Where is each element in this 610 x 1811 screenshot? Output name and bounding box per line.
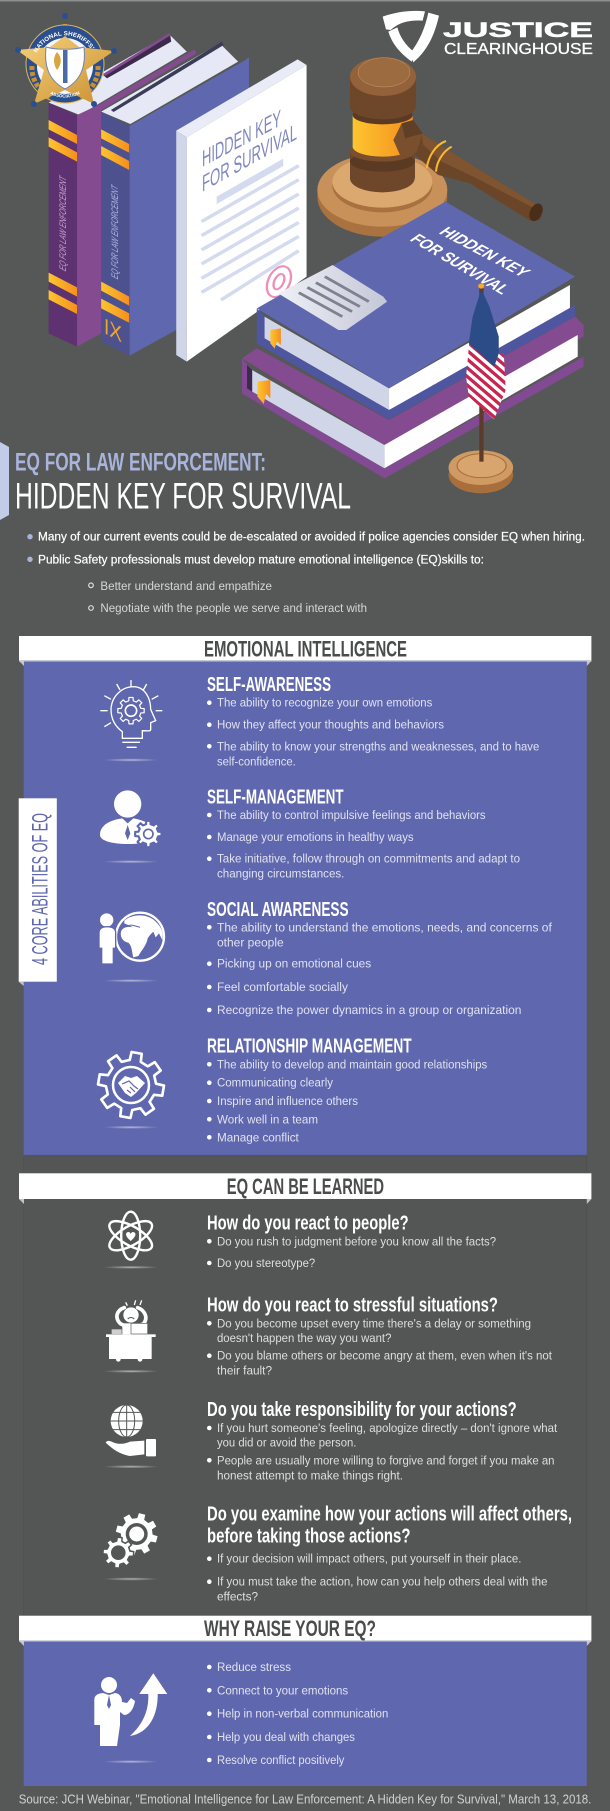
banner: why raise your EQ [19,1616,591,1646]
icon: stressed person at desk [103,1300,159,1373]
block: social awareness: SOCIAL AWARENESS [207,898,349,921]
banner: emotional intelligence [19,636,591,666]
block: self-awareness: SELF-AWARENESS [207,673,331,696]
document title: HIDDEN KEY [202,105,281,173]
banner: why raise your EQ: WHY RAISE YOUR EQ? [204,1616,376,1641]
banner: EQ can be learned: EQ CAN BE LEARNED [227,1174,384,1199]
block: social awareness: other people [217,935,284,949]
spine title: blue book: EQ FOR LAW ENFORCEMENT [111,183,121,281]
logo: National Sheriffs' Association: ASSOCIATION [50,91,80,98]
benefits list: Help in non-verbal communication [217,1707,388,1721]
block: relationship management: RELATIONSHIP MANAGEMENT [207,1034,412,1057]
block: relationship management: Inspire and influence others [217,1094,358,1108]
block: reacting to stress: How do you react to stressful situations? [207,1293,498,1316]
document title: FOR SURVIVAL [202,119,297,198]
block: taking responsibility: People are usually more willing to forgive and forget if you make an [217,1453,555,1467]
benefits list: Resolve conflict positively [217,1753,345,1767]
block: self-management: Manage your emotions in healthy ways [217,830,414,844]
intro bullet list: Better understand and empathize [100,579,272,593]
panel: why raise your EQ [19,1616,591,1786]
block: relationship management: Work well in a team [217,1112,318,1126]
spine title: purple book: EQ FOR LAW ENFORCEMENT [59,174,69,273]
block: self-awareness: The ability to recognize your own emotions [217,696,432,710]
block: reacting to people: Do you stereotype? [217,1256,315,1270]
block: self-management: Take initiative, follow through on commitments and adapt to [217,852,520,866]
block: social awareness: Picking up on emotional cues [217,957,371,971]
block: reacting to stress [207,1293,553,1377]
logo wordmark: JUSTICE [443,19,593,42]
title block: EQ FOR LAW ENFORCEMENT: [15,449,266,477]
volume number: IX [104,313,122,347]
icon: two gears [102,1509,162,1581]
banner: emotional intelligence: EMOTIONAL INTELLIGENCE [204,637,407,662]
intro bullet list [27,530,585,615]
panel: emotional intelligence [19,636,591,1156]
block: examining actions: effects? [217,1589,258,1603]
block: self-management: SELF-MANAGEMENT [207,785,344,808]
block: examining actions: If your decision will impact others, put yourself in their place. [217,1552,521,1566]
panel: EQ can be learned [19,1156,591,1616]
side tab: 4 core abilities of EQ [19,798,57,986]
banner: EQ can be learned [19,1173,591,1204]
block: reacting to people [207,1211,496,1270]
benefits list [207,1660,388,1767]
block: social awareness: Feel comfortable socially [217,980,349,994]
lying books and flag [242,202,584,493]
intro bullet list: Public Safety professionals must develop mature emotional intelligence (EQ)skills to: [38,552,484,566]
icon: hand holding globe [103,1405,159,1468]
icon: head with gear and light rays [100,680,162,762]
block: self-awareness: self-confidence. [217,754,296,768]
block: taking responsibility: you did or avoid the person. [217,1436,356,1450]
logo: National Sheriffs' Association: NATIONAL SHERIFFS' [34,31,94,53]
block: examining actions [207,1503,572,1603]
document title [202,105,297,198]
book cover title: HIDDEN KEY [435,225,534,280]
block: social awareness [207,898,552,1017]
lying blue book [257,202,575,419]
block: examining actions: before taking those actions? [207,1524,410,1547]
block: reacting to stress: Do you blame others or become angry at them, even when it's not [217,1349,553,1363]
benefits list: Connect to your emotions [217,1683,348,1697]
logo: Justice Clearinghouse: CLEARINGHOUSE [444,41,593,58]
title block [0,442,351,520]
hero illustration: books, gavel and flag [49,33,584,493]
standing document [176,59,307,362]
logo shield [383,11,439,62]
block: self-management [207,785,520,881]
block: social awareness: Recognize the power dynamics in a group or organization [217,1003,521,1017]
title block: HIDDEN KEY FOR SURVIVAL [15,475,351,516]
benefits list: Reduce stress [217,1660,291,1674]
upright books and document [49,33,307,362]
block: social awareness: The ability to understand the emotions, needs, and concerns of [217,920,552,934]
block: reacting to stress: doesn't happen the way you want? [217,1331,391,1345]
block: self-management: The ability to control impulsive feelings and behaviors [217,808,486,822]
logo: National Sheriffs' Association [15,13,117,107]
lying purple book [242,317,584,478]
block: self-awareness [207,673,539,768]
block: relationship management: Communicating clearly [217,1076,334,1090]
block: reacting to people: Do you rush to judgment before you know all the facts? [217,1234,496,1248]
block: taking responsibility: If you hurt someone's feeling, apologize directly – don't ignore what [217,1421,558,1435]
block: reacting to people: How do you react to people? [207,1211,409,1234]
block: taking responsibility [207,1398,558,1482]
intro bullet list: Negotiate with the people we serve and interact with [100,601,367,615]
block: self-awareness: How they affect your thoughts and behaviors [217,718,444,732]
logo: Justice Clearinghouse [383,11,593,62]
block: reacting to stress: Do you become upset every time there's a delay or something [217,1316,531,1330]
block: self-management: changing circumstances. [217,867,344,881]
block: relationship management: Manage conflict [217,1130,299,1144]
block: taking responsibility: honest attempt to make things right. [217,1468,403,1482]
intro bullet list: Many of our current events could be de-escalated or avoided if police agencies consider EQ when hiring. [38,530,585,544]
block: self-awareness: The ability to know your strengths and weaknesses, and to have [217,739,539,753]
icon: businessperson with rising arrow [94,1673,167,1763]
block: reacting to stress: their fault? [217,1363,272,1377]
desk flag [449,283,513,493]
upright blue book [101,42,249,356]
block: examining actions: If you must take the action, how can you help others deal with the [217,1575,548,1589]
icon: atom with heart [103,1212,159,1269]
gavel and sound block [317,57,545,237]
benefits list: Help you deal with changes [217,1730,355,1744]
icon: person and globe [99,913,164,982]
icon: businessperson with gear [100,790,162,863]
side tab: 4 core abilities of EQ: 4 CORE ABILITIES OF EQ [28,813,52,965]
book cover title: FOR SURVIVAL [406,231,515,297]
upright purple book [49,33,196,347]
block: relationship management [207,1034,487,1144]
icon: gear with handshake [93,1047,169,1129]
block: relationship management: The ability to develop and maintain good relationships [217,1057,487,1071]
